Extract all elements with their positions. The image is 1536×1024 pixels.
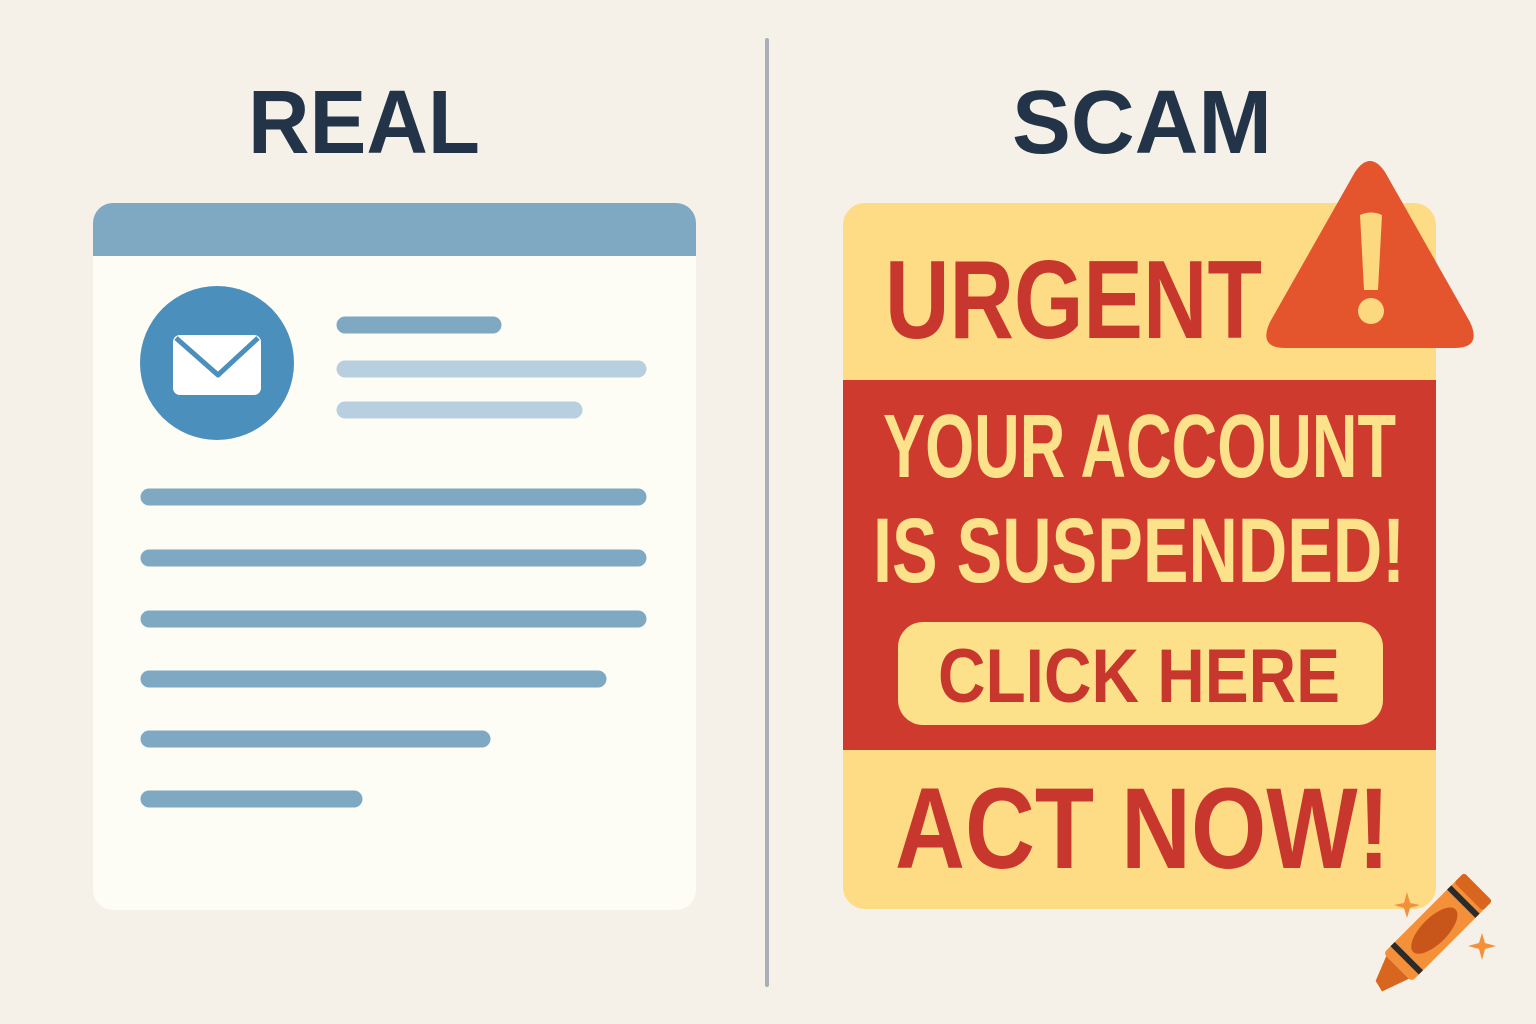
icon: warning triangle (1266, 161, 1474, 348)
icon: crayon with sparkles (1364, 873, 1496, 1001)
title: SCAM: SCAM (1012, 73, 1272, 173)
header text lines (345, 325, 638, 410)
panel: real email (93, 203, 696, 910)
text: URGENT: URGENT (885, 238, 1262, 362)
text: ACT NOW!: ACT NOW! (895, 765, 1390, 893)
button: CLICK HERE: CLICK HERE (938, 634, 1340, 719)
title: REAL: REAL (248, 73, 480, 173)
panel: scam email (843, 203, 1436, 909)
icon: envelope (140, 286, 294, 440)
body text lines (149, 497, 638, 799)
